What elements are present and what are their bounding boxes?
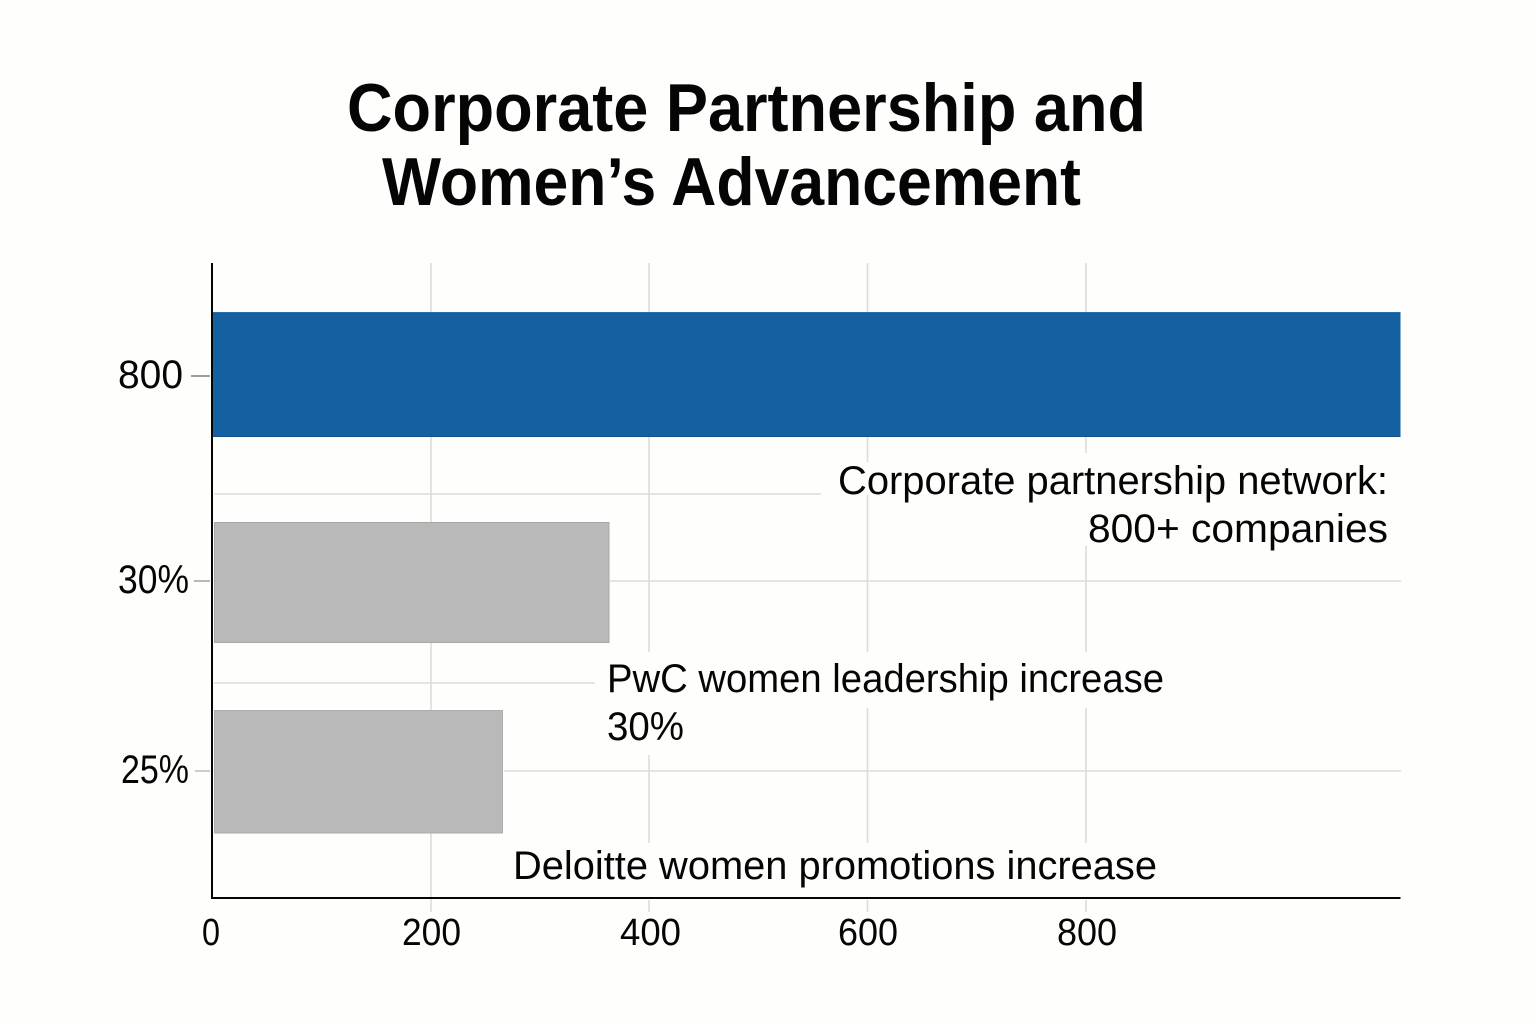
bar chart [118, 263, 1401, 954]
x-axis labels [202, 912, 1117, 954]
bar: corporate partnership network [212, 312, 1400, 437]
y-axis tick marks [191, 376, 210, 771]
title: Corporate Partnership and [347, 70, 1146, 146]
callout: PwC women leadership increase [607, 657, 1164, 749]
callout: corporate partnership network: 800+ companies [1088, 507, 1388, 551]
callout: PwC women leadership increase: PwC women leadership increase [607, 657, 1164, 701]
title: Women’s Advancement [382, 144, 1081, 220]
callout: PwC women leadership increase: 30% [607, 705, 684, 749]
bar: Deloitte women promotions increase [214, 710, 502, 833]
x-axis labels: 400 [620, 912, 681, 954]
y-axis labels: 25% [121, 748, 189, 792]
y-axis labels: 800 [118, 353, 183, 397]
y-axis labels: 30% [118, 558, 189, 602]
x-axis labels: 0 [202, 912, 220, 954]
x-axis labels: 800 [1057, 912, 1117, 954]
callout: corporate partnership network [838, 459, 1388, 551]
y-axis labels [118, 353, 189, 792]
callout: corporate partnership network: Corporate partnership network: [838, 459, 1388, 503]
x-axis labels: 600 [838, 912, 898, 954]
axes [211, 263, 1400, 899]
bar: PwC women leadership increase [214, 522, 609, 642]
title [347, 70, 1146, 220]
x-axis labels: 200 [402, 912, 461, 954]
callout: Deloitte women promotions increase: Deloitte women promotions increase [513, 844, 1157, 888]
